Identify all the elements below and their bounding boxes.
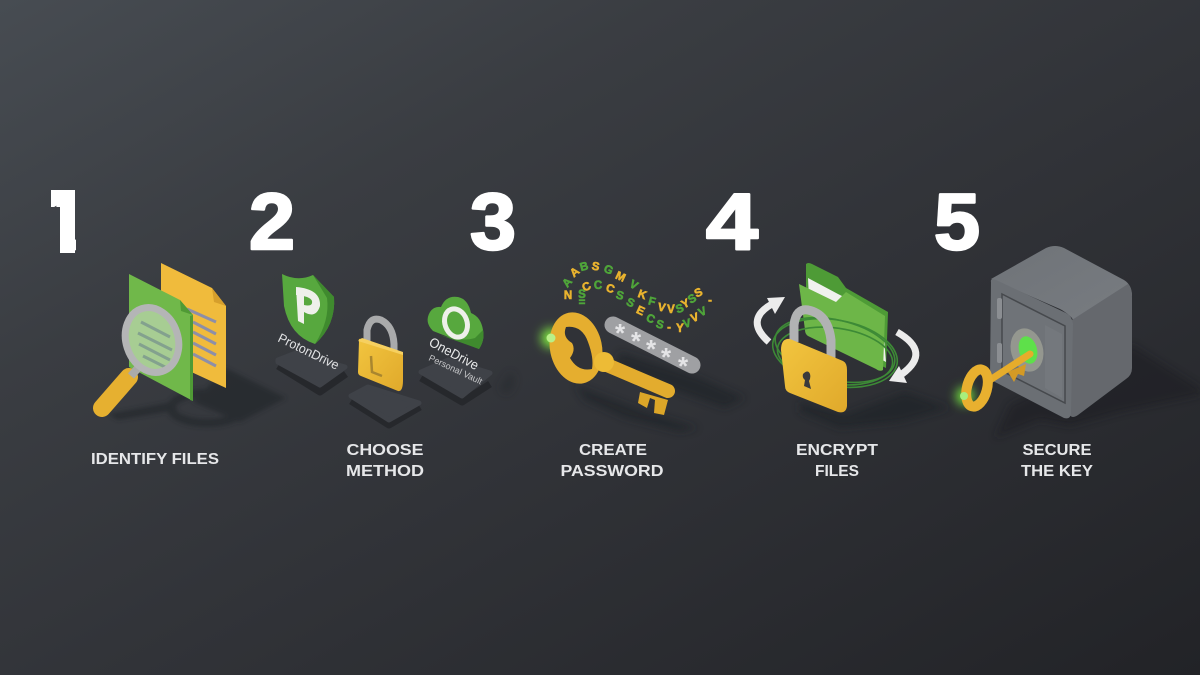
icon: golden key with glow: [541, 307, 698, 432]
icon: floating letters: V: [682, 317, 693, 331]
step 4: encrypt files: [706, 177, 950, 480]
icon: floating letters: C: [594, 280, 602, 292]
icon: floating letters: [560, 260, 712, 335]
number 4: 4: [706, 177, 759, 266]
icon: floating letters: S: [615, 289, 625, 303]
step 1: identify files: [39, 177, 286, 468]
icon: floating letters: E: [634, 304, 647, 318]
icon: floating letters: V: [627, 278, 640, 293]
rings: [767, 307, 903, 396]
icon: floating letters: =: [579, 297, 586, 309]
icon: floating letters: Y: [676, 323, 684, 335]
icon: floating letters: S: [674, 302, 686, 316]
step 3: create password: PASSWORD: [560, 463, 664, 480]
icon: password field: [613, 318, 745, 408]
icon: password field: *: [678, 351, 689, 381]
icon: padlock on platform: [351, 319, 420, 425]
number 3: 3: [470, 177, 516, 266]
icon: floating letters: V: [667, 304, 675, 316]
dial with green glow: [1006, 325, 1048, 375]
number 1: [51, 190, 76, 253]
icon: floating letters: V: [697, 305, 709, 319]
icon: floating letters: A: [560, 276, 575, 290]
icon: floating letters: S: [624, 296, 637, 310]
icon: floating letters: V: [689, 311, 701, 325]
golden key: [956, 354, 1030, 409]
icon: floating letters: B: [579, 260, 590, 274]
step 3: create password: [470, 177, 745, 480]
icon: floating letters: V: [657, 301, 667, 315]
icon: ProtonDrive shield on platform: ProtonDrive: [276, 330, 342, 373]
icon: floating letters: S: [686, 292, 699, 307]
icon: large padlock: [781, 310, 847, 412]
step 2: choose method: METHOD: [346, 463, 424, 480]
step 4: encrypt files: FILES: [815, 463, 859, 480]
icon: password field: *: [631, 326, 642, 356]
icon: OneDrive cloud on platform: [421, 297, 515, 402]
safe body: [990, 246, 1132, 418]
icon: floating letters: -: [708, 295, 712, 307]
icon: floating letters: A: [568, 265, 582, 280]
icon: floating letters: C: [604, 282, 616, 296]
icon: floating letters: Y: [680, 297, 692, 311]
icon: floating letters: C: [644, 312, 657, 326]
icon: documents and magnifier: [102, 263, 286, 423]
icon: floating letters: M: [613, 270, 627, 285]
icon: floating letters: S: [655, 318, 665, 332]
icon: password field: *: [661, 342, 672, 372]
step 5: secure the key: THE KEY: [1021, 463, 1093, 480]
icon: floating letters: S: [591, 260, 601, 274]
number 1: 1: [39, 177, 84, 266]
label: IDENTIFY FILES: [91, 451, 219, 468]
icon: ProtonDrive shield on platform: [276, 274, 346, 392]
icon: floating letters: C: [580, 280, 593, 294]
icon: green folder: [799, 263, 888, 371]
icon: OneDrive cloud on platform: OneDrive: [427, 334, 481, 373]
label: CREATE: [579, 442, 647, 459]
icon: floating letters: S: [578, 289, 586, 301]
icon: password field: *: [615, 318, 626, 348]
number 2: 2: [249, 177, 295, 266]
label: ENCRYPT: [796, 442, 878, 459]
icon: OneDrive cloud on platform: Personal Vault: [427, 353, 484, 387]
step 2: choose method: [249, 177, 515, 480]
icon: floating letters: N: [564, 290, 572, 302]
arrow: right rotation: [889, 332, 916, 383]
number 5: 5: [934, 177, 980, 266]
step 5: secure the key: [934, 177, 1200, 480]
icon: password field: *: [646, 334, 657, 364]
icon: floating letters: -: [667, 322, 671, 334]
icon: floating letters: S: [693, 286, 705, 300]
label: CHOOSE: [346, 442, 424, 459]
label: SECURE: [1022, 442, 1092, 459]
icon: folder, padlock, rings and arrows: [757, 263, 950, 428]
icon: floating letters: G: [602, 263, 615, 278]
icon: floating letters: K: [636, 288, 649, 302]
icon: safe with key: [956, 246, 1200, 438]
arrow: left rotation: [757, 297, 785, 342]
icon: floating letters: F: [647, 295, 657, 309]
